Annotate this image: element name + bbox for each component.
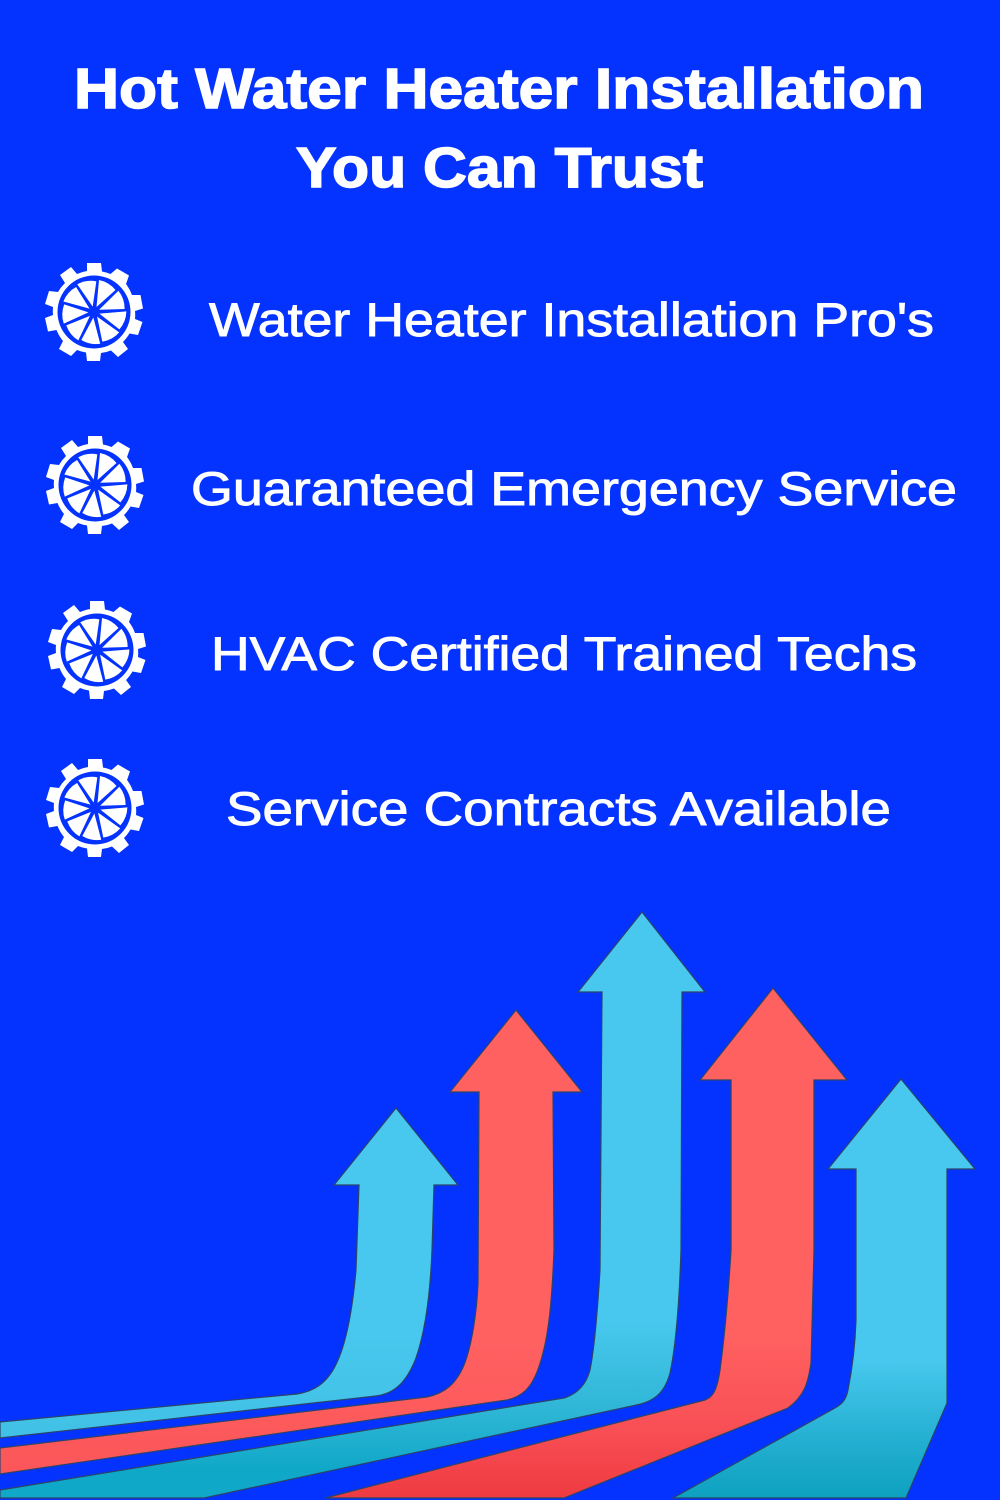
feature row: water heater installation pros	[45, 263, 934, 361]
label: Guaranteed Emergency Service: Guaranteed Emergency Service	[191, 463, 957, 516]
feature row: guaranteed emergency service	[46, 436, 957, 534]
icon: turbine gear	[48, 601, 146, 699]
arrow 1: light blue	[0, 1108, 458, 1438]
icon: turbine gear	[46, 759, 144, 857]
label: Water Heater Installation Pro's: Water Heater Installation Pro's	[209, 294, 934, 347]
title: You Can Trust	[296, 136, 703, 199]
label: HVAC Certified Trained Techs: HVAC Certified Trained Techs	[211, 628, 917, 681]
feature row: service contracts	[46, 759, 891, 857]
arrow 4: red	[325, 988, 847, 1498]
label: Service Contracts Available: Service Contracts Available	[226, 783, 891, 836]
feature row: hvac certified	[48, 601, 917, 699]
rising arrows illustration	[0, 912, 975, 1498]
icon: turbine gear	[45, 263, 143, 361]
title: Hot Water Heater Installation	[74, 57, 924, 120]
arrow 5: light blue	[673, 1079, 975, 1498]
arrow 3: light blue	[0, 912, 705, 1498]
title	[74, 57, 924, 199]
icon: turbine gear	[46, 436, 144, 534]
arrow 2: red	[0, 1010, 582, 1474]
